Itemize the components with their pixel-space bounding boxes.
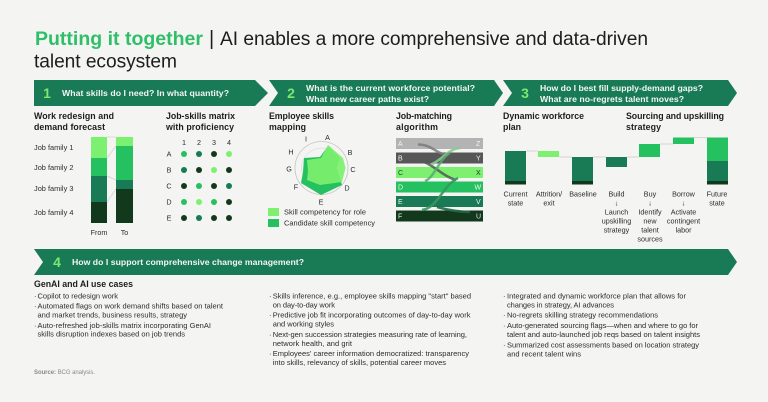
sankey diagram: B [398,156,403,162]
heading: sourcing and upskilling: Sourcing and upskilling [626,111,724,121]
panel: use cases, column 2: network health, and grit [273,339,353,348]
step 3 banner: How do I best fill supply-demand gaps? [540,83,703,93]
panel: use cases, column 3: No-regrets skilling strategy recommendations [507,310,658,320]
radar chart: H [288,148,294,156]
step 2 banner: What new career paths exist? [306,94,429,104]
stacked bar chart: from and to: To [121,228,128,237]
matrix axis labels: D [166,198,172,206]
waterfall labels: ↓ [682,198,685,208]
waterfall labels: ↓ [615,198,618,208]
waterfall labels: Baseline [569,190,597,198]
panel: use cases, column 2: · [269,292,272,300]
stacked bar chart: from and to: From [91,228,107,237]
waterfall labels: talent [641,226,659,234]
panel: use cases, column 3: Summarized cost assessments based on location strategy [507,340,699,350]
panel: use cases, column 3: Integrated and dynamic workforce plan that allows for [507,292,686,300]
waterfall labels: Buy [644,190,657,198]
panel: work redesign and demand forecast [34,111,133,237]
panel: job-skills matrix [165,111,235,222]
waterfall labels: labor [676,226,692,234]
panel: use cases, column 2: Employees' career information democratized: transparency [273,349,469,358]
sankey diagram: W [474,184,482,192]
matrix axis labels: C [166,182,172,190]
panel: use cases, column 3: and recent talent wins [507,349,581,358]
matrix axis labels: B [167,166,172,174]
step 1 banner: 1 [43,85,51,101]
sankey diagram [396,138,483,222]
waterfall labels: state [709,198,725,208]
panel: use cases, column 2: · [269,349,272,358]
sankey diagram: V [476,199,481,206]
sankey diagram: U [476,214,481,220]
radar legend: Candidate skill competency [284,218,375,228]
title: AI enables a more comprehensive and data-driven [220,29,648,50]
radar legend [268,208,375,228]
matrix axis labels: 3 [212,138,216,147]
use case bullets: skills disruption indexes based on job trends [38,330,185,338]
panel: use cases, column 2: Skills inference, e.g., employee skills mapping "start" based [273,292,471,300]
waterfall labels: Current [504,190,527,198]
step 4 banner [34,249,737,275]
radar chart: E [319,198,324,206]
heading: work redesign: demand forecast [34,122,105,132]
step 2 banner [269,80,503,106]
panel: use cases, column 2: Next-gen succession strategies measuring rate of learning, [273,330,467,339]
waterfall labels: Launch [605,208,628,216]
panel: use cases, column 3: talent and auto-launched job reqs based on talent insights [507,330,700,339]
panel: GenAI and AI use cases, column 1 [34,279,224,338]
title: Putting it together [35,28,203,50]
use case bullets: · [34,292,36,300]
sankey diagram: F [398,214,402,220]
step 2 banner: What is the current workforce potential? [306,83,475,93]
waterfall labels: Activate [671,208,696,216]
waterfall labels: ↓ [648,198,652,208]
panel: employee skills mapping [268,111,375,228]
title: | [209,28,214,50]
radar chart: I [305,134,307,144]
panel: use cases, column 2: on day-to-day work [273,300,335,310]
waterfall labels: exit [543,198,555,208]
matrix axis labels: 4 [227,138,231,147]
panel: use cases, column 3: · [503,321,506,330]
step 4 banner: How do I support comprehensive change management? [72,257,304,267]
heading: job-skills matrix: Job-skills matrix [166,111,235,121]
radar chart: B [348,148,353,157]
waterfall labels: Future [707,190,727,198]
step 2 banner: 2 [287,85,295,101]
step 3 banner: What are no-regrets talent moves? [540,94,684,104]
step 3 banner: 3 [521,85,529,101]
heading: dynamic workforce plan: plan [503,122,521,132]
panel: use cases, column 2: · [269,330,272,339]
step 1 banner: What skills do I need? In what quantity? [62,88,229,98]
panel: use cases, column 3: changes in strategy, AI advances [507,300,614,310]
heading: sourcing and upskilling: strategy [626,122,661,132]
waterfall labels: Build [609,190,624,198]
use case bullets [34,292,224,338]
sankey diagram: A [398,141,403,148]
matrix axis labels [166,138,231,222]
heading: dynamic workforce plan: Dynamic workforce [503,111,584,121]
panel: use cases, column 2: Predictive job fit incorporating outcomes of day-to-day work [273,310,471,320]
waterfall labels: Attrition/ [536,190,562,198]
panel: use cases, column 3: Auto-generated sourcing flags—when and where to go for [507,321,698,330]
job family labels: Job family 3 [34,184,73,193]
panel: use cases, column 3 [503,292,700,358]
use case bullets: · [34,302,36,310]
panel: use cases, column 2: into skills, relevancy of skills, potential career moves [273,358,446,367]
use case bullets: Auto-refreshed job-skills matrix incorporating GenAI [38,321,211,330]
waterfall labels [504,190,727,244]
job family labels: Job family 1 [34,143,73,152]
step 4 banner: 4 [53,254,61,270]
source note: Source: BCG analysis. [34,370,95,376]
radar chart: F [294,182,299,192]
use case bullets: · [34,321,36,330]
waterfall labels: Borrow [672,190,696,198]
heading: GenAI use cases: GenAI and AI use cases [34,279,133,289]
use case bullets: and market trends, business results, strategy [38,310,187,320]
matrix axis labels: A [167,150,172,158]
panel: use cases, column 2: · [269,310,272,320]
waterfall labels: sources [637,234,663,244]
waterfall labels: contingent [667,216,700,226]
waterfall labels: strategy [604,226,630,234]
stacked bar chart: from and to [91,137,133,237]
heading: job-skills matrix: with proficiency [165,122,234,132]
radar chart: D [344,184,350,192]
radar legend: Skill competency for role [284,208,366,216]
heading: work redesign: Work redesign and [34,111,114,121]
radar chart: A [325,133,330,142]
sankey diagram: D [398,184,403,192]
waterfall labels: upskilling [602,216,631,226]
job family labels [34,143,73,217]
heading: employee skills: mapping [269,122,306,132]
sankey diagram: E [398,199,403,206]
sankey diagram: C [398,170,403,177]
matrix dots [181,151,232,221]
sankey diagram: X [476,170,481,177]
sankey diagram: Y [476,156,481,162]
waterfall chart [505,138,728,184]
matrix axis labels: 1 [182,138,186,147]
radar chart [286,133,356,206]
job family labels: Job family 2 [34,163,73,172]
radar chart: C [350,165,356,174]
use case bullets: Copilot to redesign work [38,292,118,300]
use case bullets: Automated flags on work demand shifts based on talent [38,302,224,310]
waterfall labels: new [643,216,657,226]
radar chart: G [286,164,292,174]
heading: job-matching: Job-matching [396,111,452,121]
heading: job-matching: algorithm [396,122,438,132]
panel: use cases, column 3: · [503,310,506,320]
panel: use cases, column 3: · [503,340,506,350]
heading: employee skills: Employee skills [269,111,334,121]
panel: dynamic workforce plan and sourcing [503,111,728,244]
matrix axis labels: E [167,214,172,222]
panel: job-matching algorithm [396,111,483,222]
title [34,28,648,72]
step 3 banner [503,80,737,106]
matrix axis labels: 2 [197,138,201,147]
sankey diagram: Z [476,141,481,148]
job family labels: Job family 4 [34,208,73,217]
waterfall labels: Identify [638,208,662,216]
waterfall labels: state [508,198,523,208]
panel: use cases, column 2: and working styles [273,320,334,328]
title: talent ecosystem [34,52,177,72]
panel: use cases, column 2 [269,292,471,367]
step 1 banner [34,80,268,106]
panel: use cases, column 3: · [503,292,506,300]
